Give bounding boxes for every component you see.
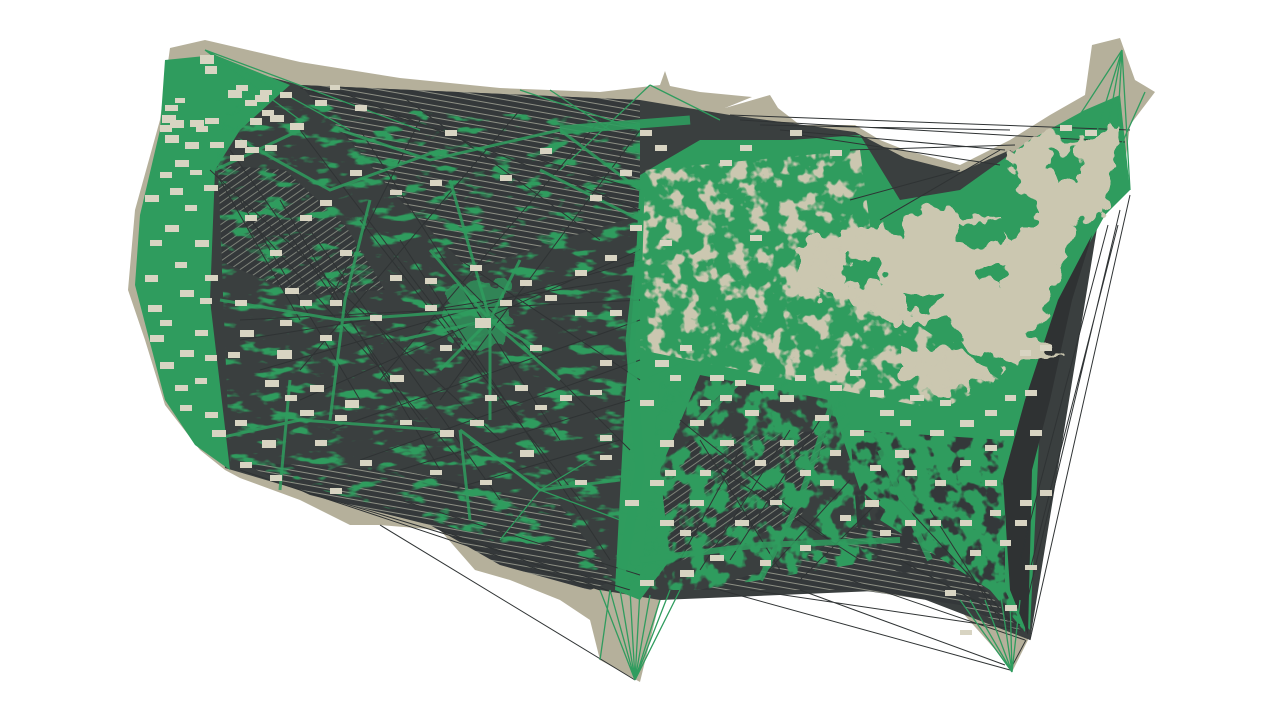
- north route band: [300, 85, 640, 270]
- northwest fan of routes: [218, 165, 385, 295]
- south-central routes: [655, 430, 830, 565]
- network base: dark route mass: [205, 60, 1100, 640]
- east coast dark wedge: [1003, 235, 1092, 635]
- map: taupe US outline: [128, 38, 1155, 682]
- dark route lines: [210, 88, 1130, 680]
- green regions: [135, 55, 1130, 632]
- dense bill clusters: Midwest and Northeast: [790, 125, 1120, 395]
- green mottling across the west and south: [215, 100, 640, 590]
- gulf routes: [700, 520, 1022, 632]
- dollar bills: [145, 55, 1097, 635]
- mottled bills in the upper Midwest: [640, 150, 1000, 410]
- southern route band: [240, 462, 615, 590]
- green route lines: [205, 50, 1145, 680]
- green patches inside the bill clusters: [840, 150, 1085, 315]
- green mottling across south-central: [640, 380, 880, 590]
- green hub around the central plains: [440, 280, 510, 350]
- dark mottling across the southeast: [850, 430, 1025, 632]
